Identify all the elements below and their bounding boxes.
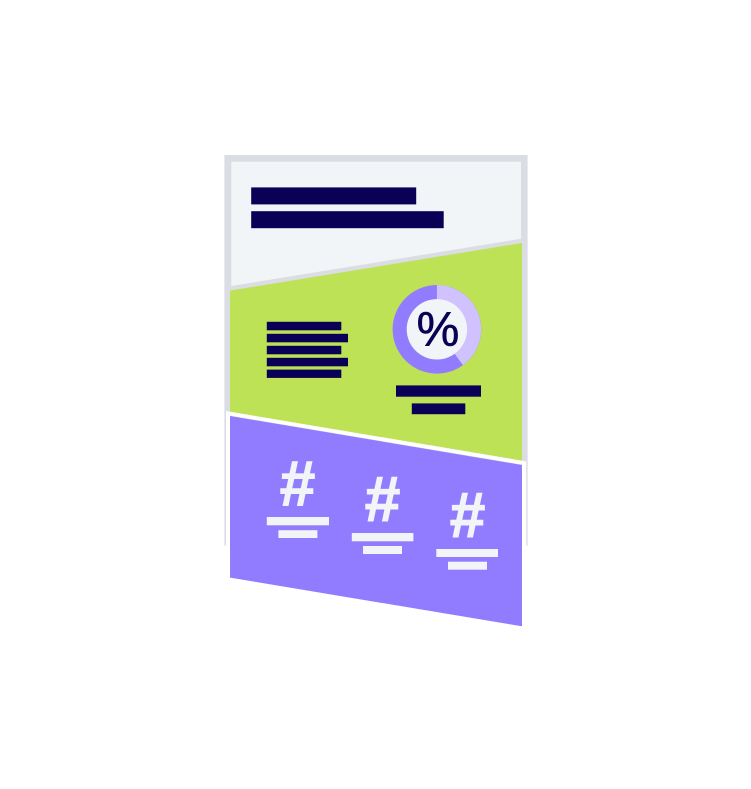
stat 2: # (365, 463, 400, 535)
document frame (224, 155, 528, 546)
stat 3 (436, 479, 498, 570)
panel: statistics (230, 416, 522, 626)
stat 3: # (450, 479, 485, 551)
stat 1 (267, 447, 329, 538)
panel: header (231, 162, 521, 286)
donut caption lines (396, 385, 481, 414)
stat 1: # (280, 447, 315, 519)
heading lines (251, 187, 444, 228)
summary background (230, 243, 522, 461)
text lines (267, 322, 348, 378)
header background (231, 162, 521, 286)
panel: summary (230, 243, 522, 461)
percent sign: % (417, 304, 459, 356)
donut chart (393, 285, 481, 374)
white divider band (226, 411, 526, 546)
stat 2 (352, 463, 413, 554)
statistics background (230, 416, 522, 626)
